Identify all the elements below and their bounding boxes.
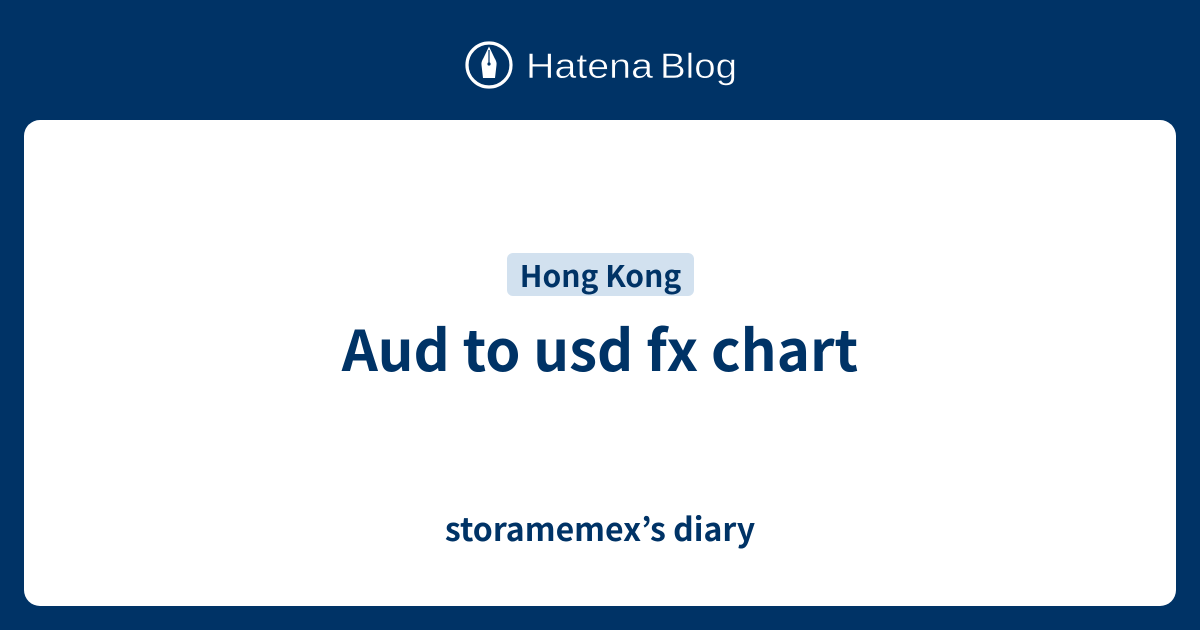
category tag: Hong Kong: Hong Kong bbox=[520, 252, 681, 296]
logo wordmark: Hatena bbox=[526, 47, 654, 86]
logo wordmark: Blog bbox=[660, 47, 737, 86]
white content panel bbox=[24, 120, 1176, 606]
icon: fountain pen nib in circle bbox=[467, 43, 511, 87]
title: Aud to usd fx chart bbox=[342, 307, 858, 388]
blog name: storamemex’s diary bbox=[445, 505, 755, 551]
header logo: Hatena Blog bbox=[465, 41, 737, 89]
